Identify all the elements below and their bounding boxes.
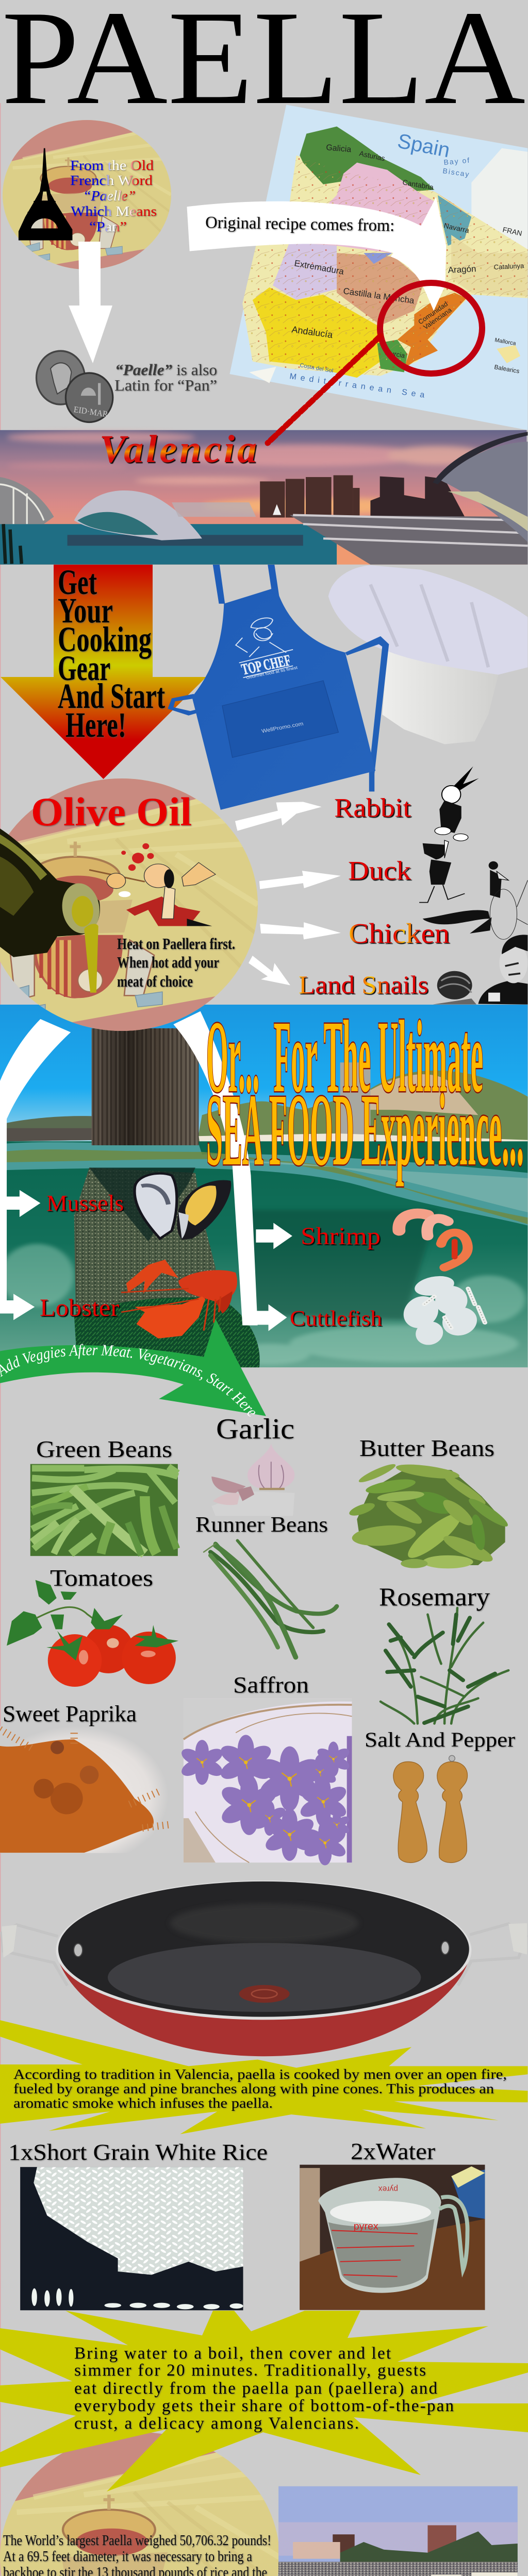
panel: map of Spain: Costa del Sol xyxy=(299,362,334,374)
heading: ultimate sea food experience xyxy=(206,1000,524,1187)
text: add veggies after meat: Add Veggies After Meat. Vegetarians, Start Here xyxy=(0,1344,255,1417)
arrows: meats xyxy=(235,802,341,985)
icon: chicken cartoon xyxy=(423,861,527,939)
panel: world's largest paella flag circle xyxy=(0,2432,279,2576)
text: get your cooking gear: Your xyxy=(58,591,113,630)
text: Paelle is also Latin for Pan: “Paelle” is also xyxy=(115,361,217,379)
icon: mussels xyxy=(135,1174,231,1240)
icon: Eiffel tower xyxy=(19,148,72,240)
icon: Olive Oyl cartoon xyxy=(89,843,216,926)
label: water: 2xWater xyxy=(351,2138,435,2164)
label: garlic: Garlic xyxy=(216,1413,294,1445)
label: sweet paprika: Sweet Paprika xyxy=(3,1701,137,1726)
label: rabbit: Rabbit xyxy=(334,793,411,823)
image: sweet paprika xyxy=(0,1726,169,1853)
arrow: veggies green xyxy=(0,1319,266,1417)
text: get your cooking gear: Get xyxy=(58,563,97,602)
panel: map of Spain: FRAN xyxy=(502,225,523,238)
highlight: red circle on Valencia region xyxy=(380,283,482,374)
panel: map of Spain: Comunidad xyxy=(417,300,449,326)
panel: map of Spain: Biscay xyxy=(442,166,471,178)
text: from the old French word: Which Means xyxy=(71,204,157,219)
label: lobster: Lobster xyxy=(40,1294,119,1321)
text: get your cooking gear xyxy=(58,563,165,744)
logo: top chef xyxy=(236,618,286,657)
panel: map of Spain: Navarra xyxy=(443,221,470,234)
panel: vegetables and spices xyxy=(0,1413,515,1866)
panel: French word origin flag circle xyxy=(3,120,171,269)
text: heat on paellera first xyxy=(117,935,235,990)
icon: Roman coins: EID·MAR xyxy=(73,404,109,419)
icon: lobster xyxy=(121,1260,237,1338)
panel: map of Spain: Asturias xyxy=(358,149,386,162)
text: bring water to a boil: Bring water to a boil, then cover and let xyxy=(74,2344,391,2363)
image: measuring cup of water xyxy=(300,2165,485,2310)
text: from the old French word xyxy=(70,158,157,234)
text: get your cooking gear: Here! xyxy=(65,705,126,744)
panel: olive oil flag circle xyxy=(0,778,258,1031)
panel: map of Spain: Castilla la Mancha xyxy=(342,286,415,306)
text: heat on paellera first: When hot add your xyxy=(117,953,219,971)
text: heat on paellera first: meat of choice xyxy=(117,972,193,990)
text: get your cooking gear: Cooking xyxy=(58,620,152,659)
text: get your cooking gear: And Start xyxy=(58,676,165,716)
label: shrimp: Shrimp xyxy=(301,1223,381,1250)
text: bring water to a boil xyxy=(74,2344,454,2433)
panel: map of Spain: Balearics xyxy=(493,363,520,375)
label: short grain white rice: 1xShort Grain White Rice xyxy=(8,2140,268,2165)
label: land snails: Land Snails xyxy=(299,970,428,999)
text: bring water to a boil: everybody gets their share of bottom-of-the-pan xyxy=(74,2397,454,2415)
label: cuttlefish: Cuttlefish xyxy=(290,1307,382,1331)
text: bring water to a boil: crust, a delicacy among Valencians. xyxy=(74,2414,359,2433)
panel: sea food background xyxy=(0,1005,527,1367)
image: measuring cup of water: pyrex xyxy=(354,2221,378,2232)
image: measuring cup of water: pyrex xyxy=(378,2184,398,2193)
text: from the old French word: From the Old xyxy=(70,158,154,173)
icon: blue apron: TOP CHEF xyxy=(240,652,293,679)
icon: snail and man xyxy=(433,935,527,1005)
image: giant paella photo xyxy=(278,2486,518,2576)
text: according to tradition xyxy=(13,2066,507,2111)
image: salt and pepper mills xyxy=(393,1755,468,1862)
label: Valencia: Valencia xyxy=(100,428,260,471)
label: tomatoes: Tomatoes xyxy=(50,1565,153,1591)
label: green beans: Green Beans xyxy=(36,1436,172,1462)
label: butter beans: Butter Beans xyxy=(359,1435,494,1461)
label: chicken: Chicken xyxy=(349,918,450,949)
image: runner beans xyxy=(204,1540,337,1657)
panel: map of Spain: Bay of xyxy=(443,156,471,166)
image: rice xyxy=(20,2167,243,2310)
text: according to tradition: fueled by orange and pine branches along with pine cones. This produces an xyxy=(13,2081,494,2096)
icon: blue apron: Gourmet food at its finest xyxy=(245,665,299,680)
arrow: left seafood branch xyxy=(0,1019,71,1320)
icon: Roman coins xyxy=(37,351,113,422)
text: heat on paellera first: Heat on Paellera first. xyxy=(117,935,235,953)
image: saffron plate xyxy=(179,1698,352,1866)
starburst: tradition note xyxy=(0,2020,527,2134)
icon: duck cartoon xyxy=(419,840,465,903)
label: salt and pepper: Salt And Pepper xyxy=(365,1728,515,1751)
arrow: right seafood branch xyxy=(173,1011,292,1331)
panel: map of Spain: Catalunya xyxy=(493,262,524,271)
panel: map of Spain xyxy=(229,105,527,430)
panel: map of Spain: Galicia xyxy=(326,143,352,154)
text: original recipe comes from: Original recipe comes from: xyxy=(205,213,394,235)
text: from the old French word: “Pan” xyxy=(89,219,127,234)
image: rosemary xyxy=(381,1608,508,1723)
text: according to tradition: aromatic smoke which infuses the paella. xyxy=(13,2095,273,2111)
text: bring water to a boil: simmer for 20 minutes. Traditionally, guests xyxy=(74,2361,426,2380)
arrow: cooking gear gradient xyxy=(1,563,206,779)
image: green beans xyxy=(30,1464,178,1556)
icon: shrimp xyxy=(399,1213,468,1267)
panel: map of Spain: Mallorca xyxy=(494,337,517,347)
label: duck: Duck xyxy=(348,856,411,886)
text: get your cooking gear: Gear xyxy=(58,649,110,688)
icon: chef hat xyxy=(328,565,527,744)
panel: map of Spain: Murcia xyxy=(384,348,406,360)
image: paella pan xyxy=(2,1880,527,2056)
label: rosemary: Rosemary xyxy=(379,1582,490,1611)
text: world's largest paella xyxy=(3,2533,279,2576)
panel: map of Spain: Extremadura xyxy=(293,258,345,277)
text: Paelle is also Latin for Pan: Latin for “Pan” xyxy=(114,376,217,394)
text: from the old French word: French Word xyxy=(70,173,153,188)
panel: map of Spain: Aragón xyxy=(448,264,476,275)
text: from the old French word: “Paelle” xyxy=(83,188,136,204)
label: olive oil: Olive Oil xyxy=(31,789,192,834)
label: runner beans: Runner Beans xyxy=(195,1513,328,1537)
label: mussels: Mussels xyxy=(46,1191,124,1216)
icon: garlic xyxy=(211,1444,294,1516)
panel: map of Spain: Spain xyxy=(395,130,452,162)
panel: map of Spain: Cantabria xyxy=(402,178,434,192)
icon: olive oil bottle xyxy=(0,828,102,993)
text: world's largest paella: At a 69.5 feet diameter, it was necessary to bring a xyxy=(3,2549,252,2565)
arrow: original recipe xyxy=(187,197,446,311)
text: Paelle is also Latin for Pan xyxy=(114,361,217,394)
text: world's largest paella: The World’s largest Paella weighed 50,706.32 pounds! xyxy=(3,2533,271,2549)
panel: map of Spain: Mediterranean Sea xyxy=(289,372,429,400)
text: bring water to a boil: eat directly from the paella pan (paellera) and xyxy=(74,2379,437,2398)
image: butter beans xyxy=(348,1461,510,1568)
panel: map of Spain: Andalucía xyxy=(291,324,334,340)
icon: blue apron: WellPromo.com xyxy=(261,721,304,734)
arrow: down to coins xyxy=(69,242,112,363)
icon: rabbit cartoon xyxy=(435,767,479,841)
panel: map of Spain: Valenciana xyxy=(422,306,453,331)
text: according to tradition: According to tradition in Valencia, paella is cooked by men over an open fire, xyxy=(13,2066,507,2082)
icon: cuttlefish xyxy=(398,1273,485,1348)
panel: Valencia skyline banner xyxy=(0,428,527,565)
starburst: boil instructions xyxy=(0,2311,528,2492)
icon: blue apron xyxy=(168,565,389,810)
image: tomatoes xyxy=(7,1580,178,1687)
label: saffron: Saffron xyxy=(233,1672,309,1698)
connector: dashed line from map to Valencia xyxy=(268,336,381,443)
